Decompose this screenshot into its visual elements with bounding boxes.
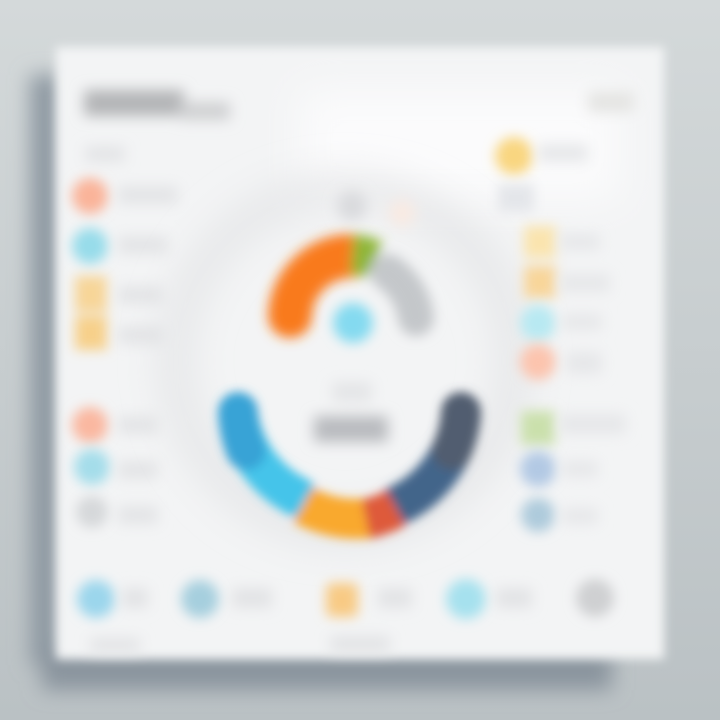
cyan segment — [238, 415, 298, 497]
right item: amber pair — [524, 226, 556, 298]
left item: amber pair — [75, 276, 107, 350]
amber segment — [303, 505, 370, 519]
centre value — [314, 382, 388, 442]
bright card highlight — [300, 90, 620, 200]
card shadow — [30, 75, 612, 690]
bottom icon: cyan — [446, 579, 486, 619]
bottom icon: amber — [326, 583, 358, 617]
left item: cyan — [72, 228, 108, 264]
left column text — [85, 146, 178, 524]
bottom icon: sky — [77, 580, 115, 618]
lower donut ring — [238, 412, 461, 519]
bottom row text — [90, 588, 532, 652]
right item: yellow — [495, 137, 533, 175]
bottom icon: grey — [576, 579, 614, 617]
top right label — [588, 92, 634, 112]
gauge cyan hub — [333, 303, 373, 343]
right item: blue — [520, 451, 556, 487]
right column legend — [495, 137, 626, 532]
navy segment — [398, 415, 461, 505]
left item: coral — [72, 178, 108, 214]
gauge grey segment — [388, 272, 416, 318]
right item: pale grey — [498, 184, 534, 212]
right item: cyan — [520, 305, 556, 341]
right column text — [538, 144, 626, 524]
bottom icon: steel — [181, 580, 219, 618]
left item: cyan lower — [74, 449, 110, 485]
title — [84, 90, 230, 120]
gauge orange segment — [290, 256, 350, 316]
right item: steel blue — [521, 498, 555, 532]
right item: green — [521, 411, 555, 445]
left column legend — [72, 146, 178, 528]
gauge top labels — [337, 191, 415, 226]
blue tip — [238, 412, 246, 450]
upper gauge — [290, 254, 416, 343]
bottom icon row — [77, 579, 614, 652]
left item: coral lower — [72, 407, 108, 443]
main card — [56, 47, 664, 659]
red segment — [366, 508, 396, 519]
left item: grey — [76, 496, 108, 528]
faint dial ring — [175, 190, 515, 530]
gauge green segment — [352, 254, 374, 260]
navy tip — [452, 412, 461, 450]
right item: coral — [520, 344, 556, 380]
